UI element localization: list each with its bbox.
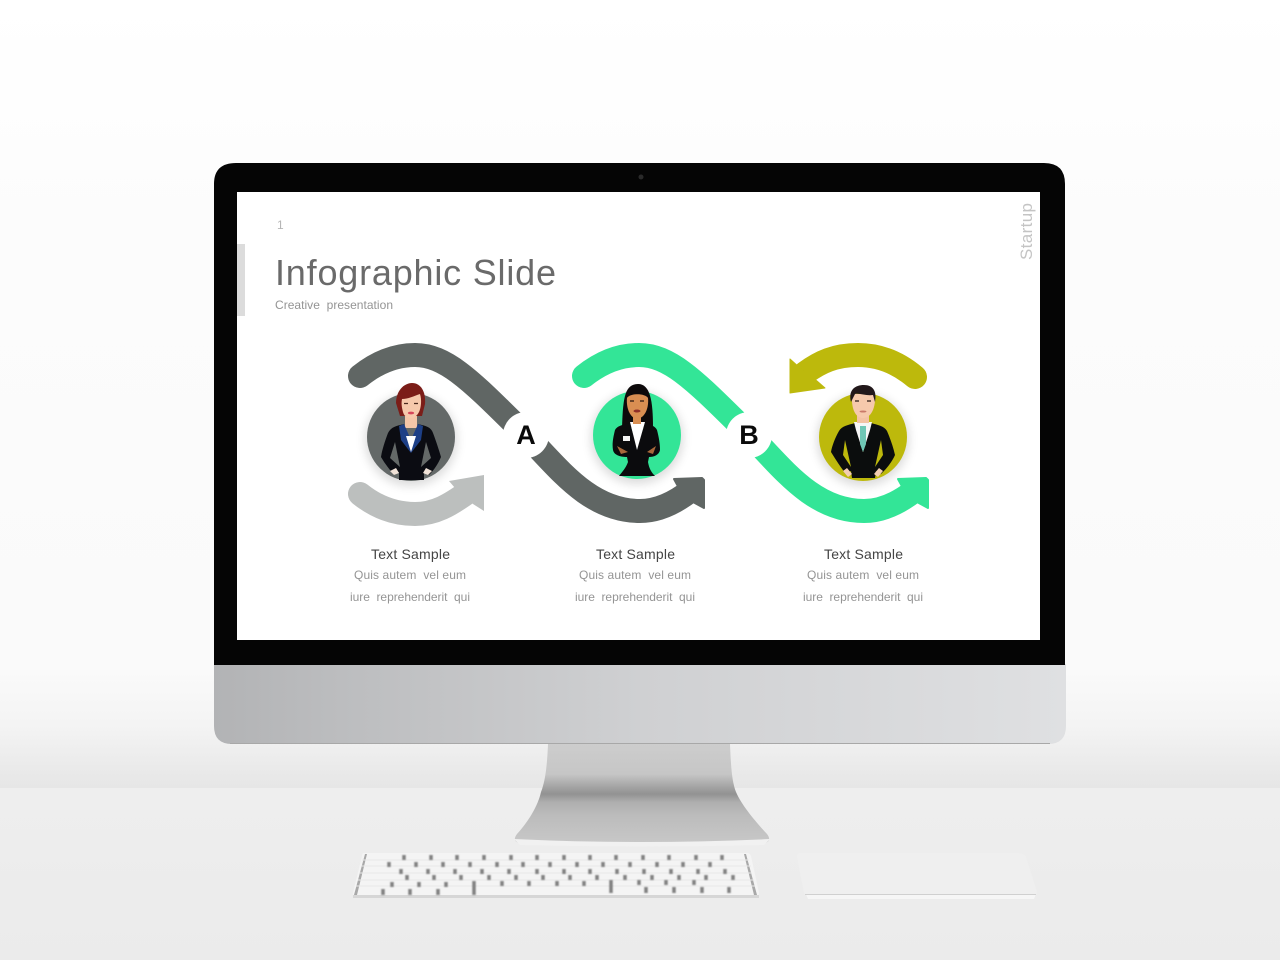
jacket	[381, 424, 441, 480]
trackpad	[797, 853, 1037, 899]
badge A	[503, 412, 549, 458]
badge B: B	[739, 420, 759, 450]
neck	[857, 412, 869, 423]
text block 2	[575, 546, 695, 604]
arm gaps	[843, 440, 883, 467]
text block 3: Quis autem vel eum	[807, 568, 919, 582]
face	[402, 394, 421, 418]
slide accent bar	[237, 244, 245, 316]
hair	[850, 385, 876, 402]
jacket	[831, 423, 895, 478]
monitor chin	[214, 664, 1066, 744]
shirt	[854, 422, 872, 452]
text block 1: Text Sample	[371, 546, 450, 562]
badge A: A	[516, 420, 536, 450]
icon: businesswoman on gray circle	[365, 383, 457, 486]
monitor	[214, 163, 1066, 846]
hair	[396, 383, 425, 416]
olive arrow	[790, 355, 915, 393]
keyboard	[353, 853, 759, 898]
text block 1	[350, 546, 470, 604]
text block 3: Text Sample	[824, 546, 903, 562]
text block 2: Quis autem vel eum	[579, 568, 691, 582]
title: Infographic Slide	[275, 252, 556, 293]
camera	[638, 174, 644, 180]
head	[852, 394, 875, 418]
hands	[390, 468, 432, 475]
hair	[622, 384, 653, 428]
name tag	[623, 436, 630, 441]
text block 2: iure reprehenderit qui	[575, 590, 695, 604]
crossed hands	[617, 446, 656, 454]
monitor stand	[514, 744, 770, 846]
shirt	[630, 422, 645, 450]
subtitle: Creative presentation	[275, 298, 393, 312]
hands	[843, 468, 883, 477]
text block 3	[803, 546, 923, 604]
slide screen	[237, 192, 1040, 640]
side label: Startup	[1017, 203, 1036, 260]
lapels	[399, 424, 423, 453]
tie	[860, 426, 866, 452]
badge B	[726, 412, 772, 458]
arm gaps	[390, 442, 431, 467]
icon: businesswoman on green circle	[591, 384, 683, 484]
table surface	[0, 788, 1280, 960]
text block 1: Quis autem vel eum	[354, 568, 466, 582]
monitor bezel	[214, 163, 1065, 665]
face	[627, 394, 648, 419]
neck	[405, 412, 417, 428]
text block 3: iure reprehenderit qui	[803, 590, 923, 604]
text block 2: Text Sample	[596, 546, 675, 562]
green S arrow	[584, 355, 928, 511]
gray S arrow	[360, 355, 704, 511]
text block 1: iure reprehenderit qui	[350, 590, 470, 604]
jacket	[613, 423, 660, 476]
icon: businessman on olive circle	[817, 385, 909, 486]
light gray arrow	[360, 475, 484, 514]
page number: 1	[277, 218, 284, 232]
